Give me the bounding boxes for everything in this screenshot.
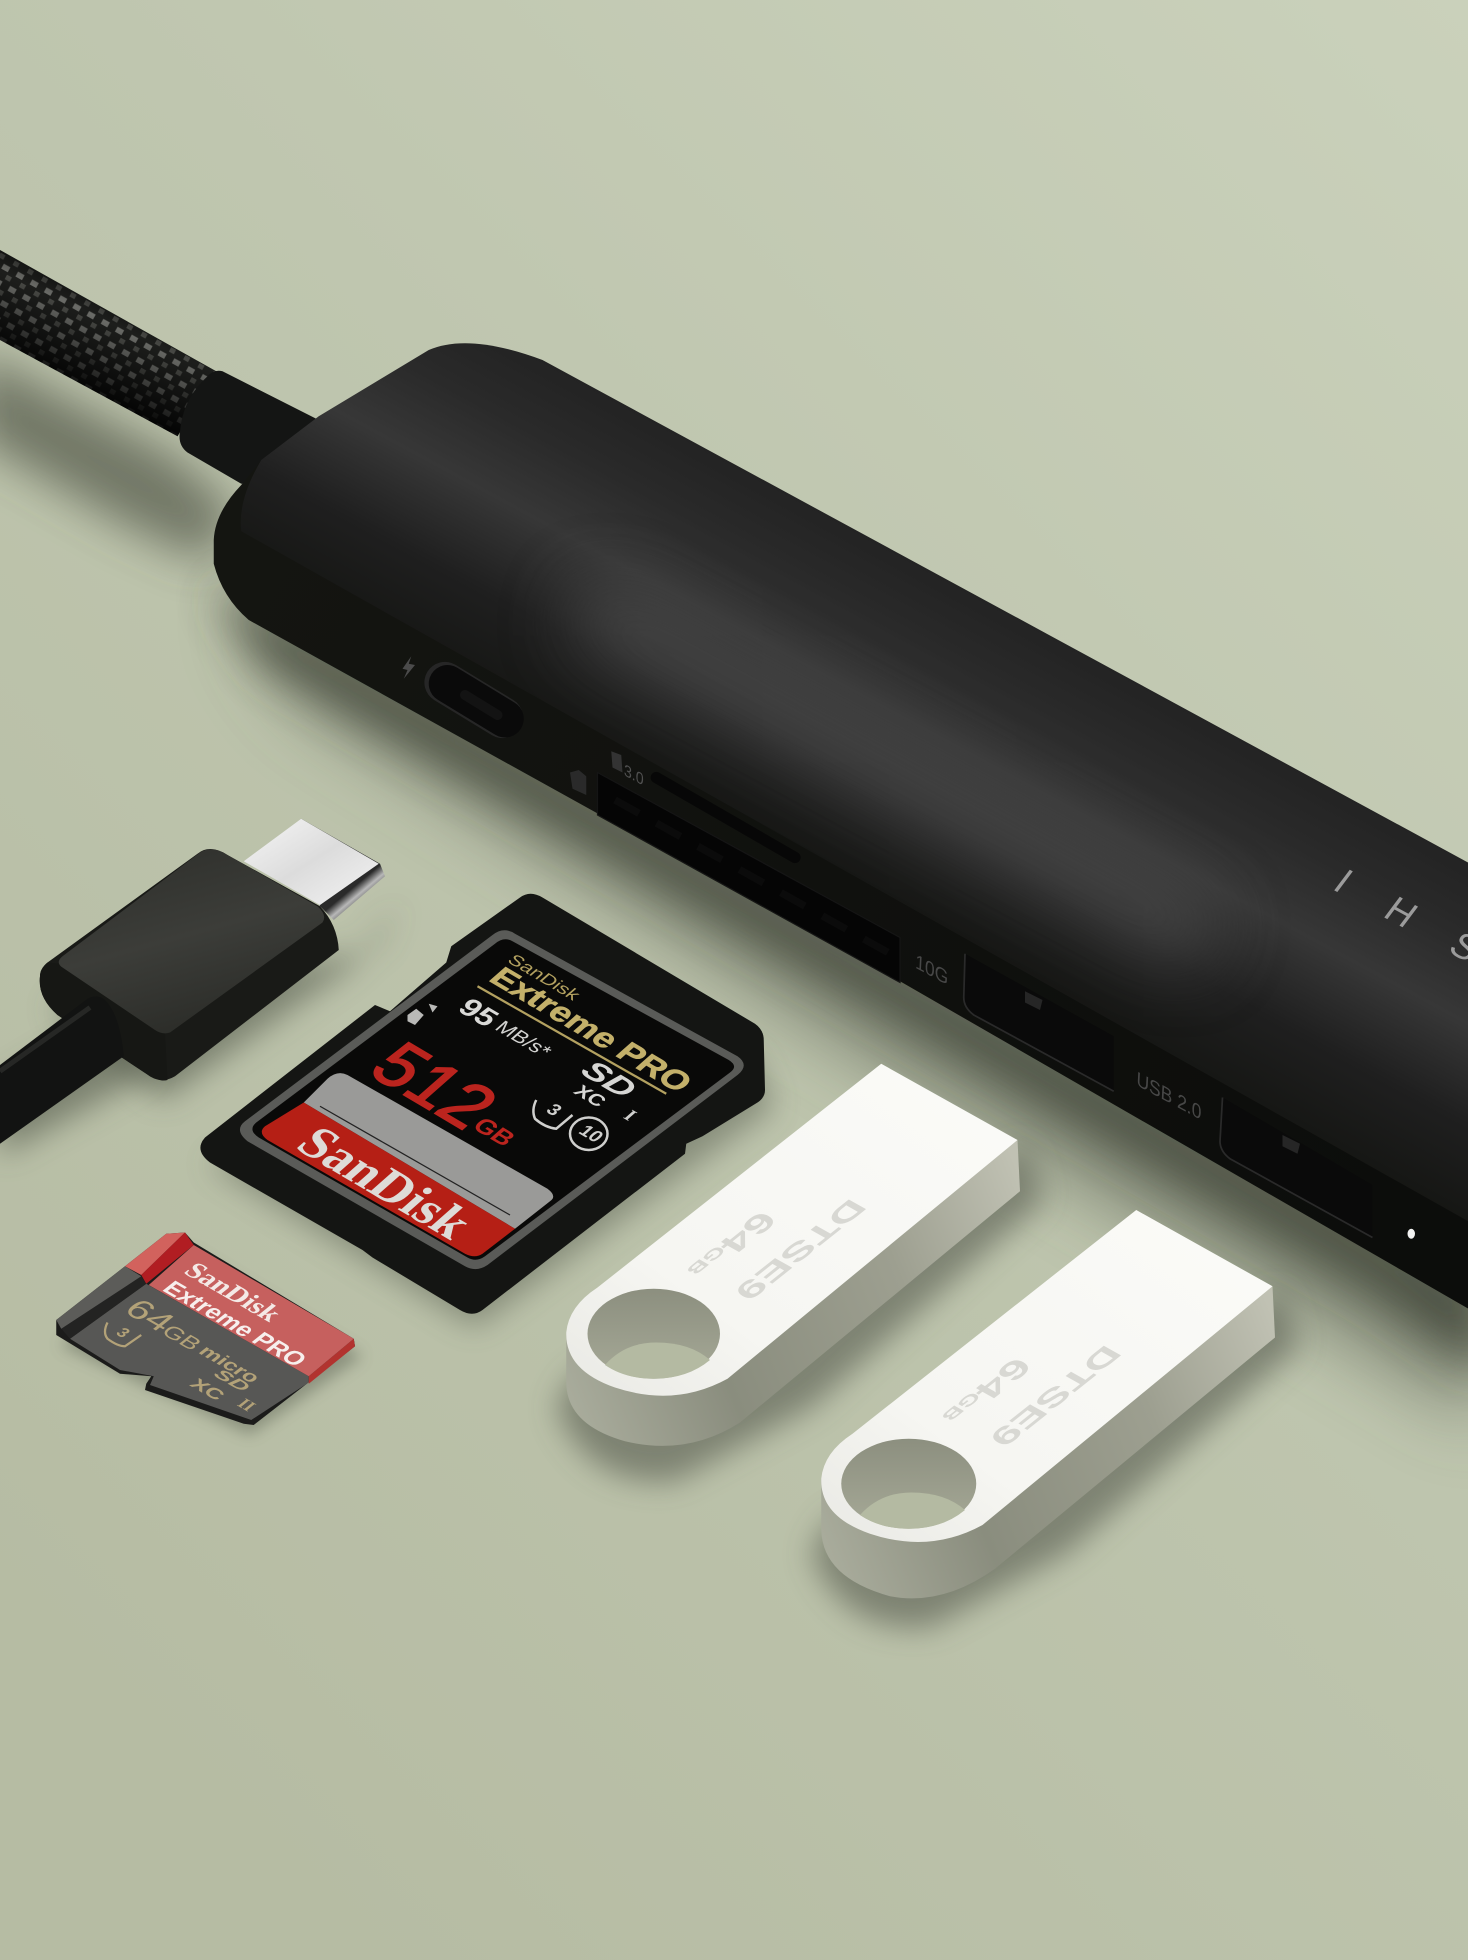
micro SD icon — [611, 751, 622, 772]
charging icon — [402, 656, 415, 679]
USB-C cable — [0, 997, 124, 1144]
SD icon — [570, 770, 586, 795]
64GB: 64 GB — [934, 1353, 1039, 1429]
grey notch corner — [56, 1266, 141, 1329]
micro: micro — [194, 1342, 265, 1386]
SanDisk: SanDisk — [178, 1258, 289, 1327]
class II: II — [233, 1395, 261, 1414]
USB drive 1 — [566, 1064, 1020, 1446]
label border — [240, 930, 744, 1269]
red face — [149, 1245, 354, 1376]
USB-C port — [445, 682, 505, 719]
hub cast shadow — [212, 588, 1468, 1375]
label 3.0: 3.0 — [624, 761, 644, 790]
label USB 2.0: USB 2.0 — [1136, 1068, 1202, 1125]
key hole — [841, 1439, 976, 1529]
gold rule — [478, 986, 666, 1094]
connector shadow — [50, 900, 402, 1100]
micro SD shadow — [60, 1250, 362, 1435]
Extreme PRO: Extreme PRO — [157, 1278, 312, 1371]
drive side wall — [821, 1286, 1275, 1598]
SD XC logo — [569, 1055, 643, 1110]
drive top face — [566, 1064, 1018, 1396]
SD card slot — [598, 772, 900, 982]
class I: I — [619, 1107, 641, 1125]
SanDisk small: SanDisk — [503, 951, 585, 1004]
USB-C hub — [214, 343, 1468, 1312]
DTSE9: DTSE9 — [981, 1340, 1128, 1451]
key hole — [588, 1289, 720, 1379]
class 10 mark: 10 — [574, 1121, 608, 1146]
class 10 mark — [570, 1118, 608, 1150]
USB-C connector — [0, 819, 385, 1144]
U3 mark: 3 — [112, 1325, 134, 1341]
cable shadow on surface — [0, 350, 238, 562]
U3 mark: 3 — [542, 1100, 567, 1119]
USB-A port 1 — [964, 954, 1114, 1091]
USB drive 2 — [821, 1210, 1275, 1598]
status LED — [1408, 1229, 1415, 1239]
SanDisk brand: SanDisk — [285, 1117, 486, 1249]
512: 512 — [354, 1030, 514, 1142]
red edge — [309, 1339, 355, 1384]
USB drive 2 shadow — [811, 1290, 1299, 1628]
SD card — [200, 894, 765, 1314]
DTSE9: DTSE9 — [726, 1194, 873, 1304]
SD XC logo: SD — [573, 1055, 643, 1104]
XC: XC — [186, 1375, 230, 1404]
metal plug — [244, 819, 385, 920]
label 10G: 10G — [915, 950, 949, 990]
hub front face — [214, 460, 1468, 1312]
cable strain relief collar — [180, 371, 316, 484]
USB drive 1 shadow — [556, 1144, 1044, 1482]
dark red stripe — [141, 1232, 194, 1284]
red notch corner — [125, 1232, 185, 1275]
hub broad shadow — [250, 600, 1468, 1425]
drive side wall — [566, 1140, 1020, 1446]
grey face — [70, 1284, 309, 1420]
USB-A port 2 — [1220, 1098, 1372, 1238]
boot end cap — [40, 962, 168, 1081]
hub top surface — [241, 343, 1468, 1225]
MB/s: MB/s* — [490, 1018, 556, 1061]
boot top face — [59, 849, 324, 1033]
black label — [252, 939, 734, 1260]
boot silhouette — [40, 849, 339, 1080]
micro SD slot — [656, 778, 795, 858]
grey write panel — [304, 1073, 553, 1229]
card body — [200, 894, 765, 1314]
Extreme PRO: Extreme PRO — [482, 962, 700, 1098]
micro SD card — [56, 1232, 355, 1425]
plug boot — [40, 849, 339, 1081]
cable shadow — [0, 1012, 150, 1156]
SD: SD — [209, 1366, 254, 1395]
95: 95 — [451, 993, 505, 1032]
hub sheen — [562, 581, 1225, 969]
red brand band — [262, 1102, 515, 1256]
GB: GB — [467, 1113, 521, 1151]
64GB: 64GB — [117, 1293, 215, 1356]
64GB: 64 GB — [679, 1207, 784, 1283]
card body — [56, 1232, 355, 1425]
U3 mark — [105, 1322, 141, 1346]
braided cable — [0, 250, 216, 436]
SD XC logo: XC — [569, 1081, 611, 1110]
SD card shadow — [206, 1050, 775, 1328]
drive top face — [821, 1210, 1272, 1542]
write line — [320, 1106, 510, 1215]
dark notch stripe — [61, 1276, 146, 1339]
lock icon — [408, 1004, 438, 1025]
U3 mark — [533, 1100, 572, 1129]
